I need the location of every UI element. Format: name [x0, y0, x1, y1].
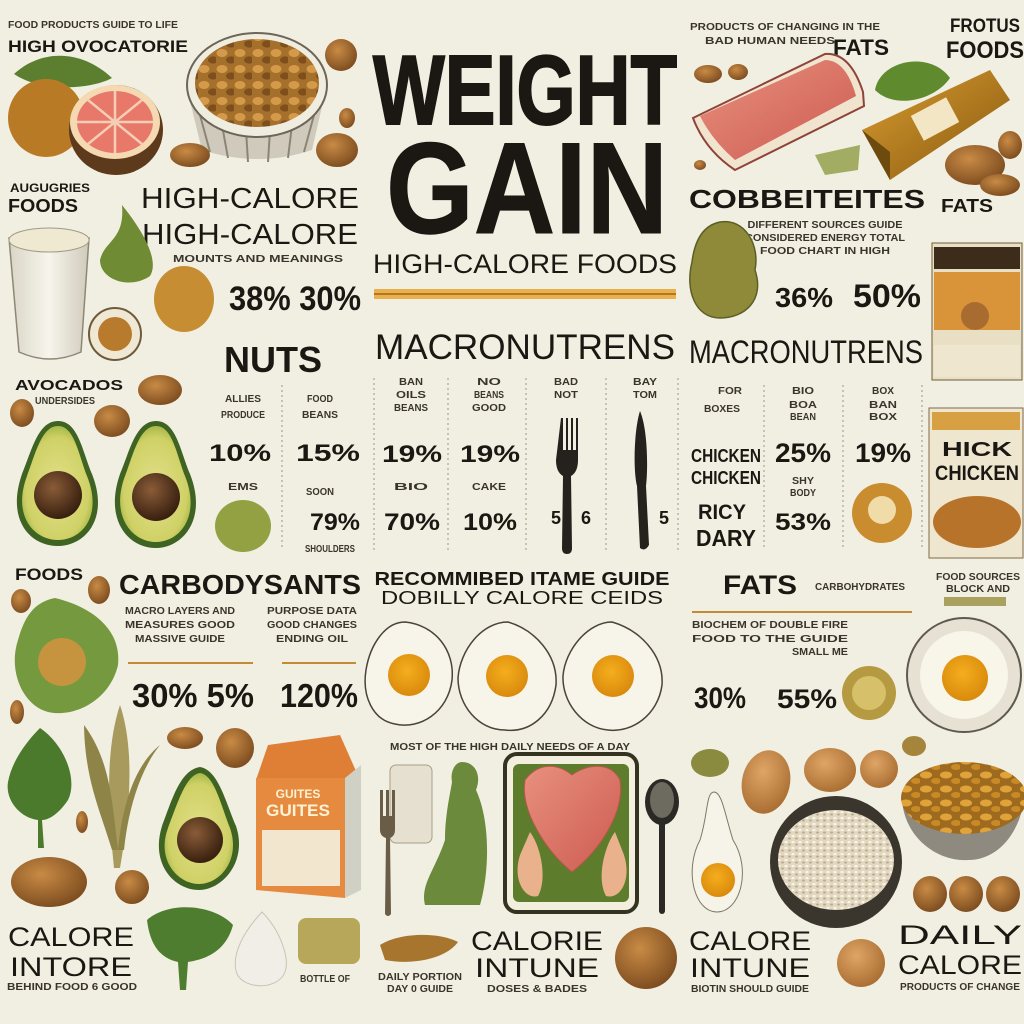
icon: green pods	[100, 205, 153, 283]
text: daily portion	[378, 972, 462, 995]
panel: right carbohydrates: CONSIDERED ENERGY TOTAL	[745, 233, 905, 244]
panel: top-right fats and foods	[690, 16, 1024, 196]
column labels: TOM	[633, 390, 657, 401]
panel: right chicken data: 53%	[775, 509, 831, 536]
panel: right chicken data: BEAN	[790, 412, 816, 423]
icon: cup	[390, 765, 432, 843]
section: high-calorie heading and milk cup: HIGH-CALORE	[141, 183, 359, 215]
icon: milk cup	[9, 228, 89, 359]
icon: nuts	[10, 375, 182, 437]
panel: bottom-right foods	[689, 736, 1024, 995]
panel: right chicken data	[691, 385, 1023, 558]
section: high-calorie heading and milk cup: HIGH-CALORE	[142, 219, 358, 251]
percent values: 30%	[694, 682, 746, 715]
icon: avocado left	[17, 421, 98, 546]
section: high-calorie heading and milk cup: MOUNTS AND MEANINGS	[173, 254, 343, 265]
title: WEIGHT	[373, 35, 677, 145]
section: top-left high calorie foods: AUGUGRIES	[10, 181, 90, 195]
data columns	[209, 385, 360, 555]
panel: right chicken data: BAN	[869, 400, 897, 411]
panel: carbohydrates left: MACRO LAYERS AND	[125, 606, 235, 617]
icon: knife	[635, 411, 649, 549]
icon: white ladle	[692, 792, 742, 912]
text: calorie intake: INTORE	[10, 952, 132, 982]
heading: macronutrients right: MACRONUTRENS	[689, 334, 923, 370]
text: calorie intake: INTUNE	[475, 953, 599, 983]
percent values: BIO	[394, 482, 428, 493]
panel: right carbohydrates: DIFFERENT SOURCES GUIDE	[748, 220, 903, 231]
text: calorie intake: DOSES & BADES	[487, 984, 587, 995]
panel: carbohydrates left	[10, 565, 361, 724]
text: calorie intake: INTUNE	[690, 953, 810, 983]
icon: snack package	[932, 243, 1022, 380]
panel: right carbohydrates: COBBEITEITES	[689, 184, 925, 214]
data columns: EMS	[228, 482, 258, 493]
panel: top-right fats and foods: FATS	[833, 35, 889, 60]
percent: 36 and 30: 38% 30%	[229, 280, 361, 318]
icon: raw steak	[693, 54, 864, 170]
panel: avocados	[10, 375, 360, 555]
icon: egg plate	[907, 618, 1021, 732]
icon: squash half	[8, 79, 84, 157]
icon: milk carton	[256, 735, 361, 898]
panel: fats bottom-right: CARBOHYDRATES	[815, 582, 905, 593]
icon: pistachios	[298, 918, 360, 964]
percent values: 19%	[460, 441, 520, 468]
panel: recommended intake guide	[365, 569, 670, 753]
panel: right carbohydrates: 50%	[853, 278, 921, 314]
panel: right chicken data: BOX	[872, 386, 894, 397]
panel: top-right fats and foods: PRODUCTS OF CHANGING IN THE	[690, 22, 880, 33]
percent values: 19%	[382, 441, 442, 468]
title: GAIN	[386, 115, 668, 261]
panel: right chicken data: CHICKEN	[691, 446, 761, 466]
column labels: NOT	[554, 390, 578, 401]
panel: bottom-left foods	[7, 705, 361, 993]
text: daily portion: DAILY PORTION	[378, 972, 462, 983]
icon: nuts	[11, 727, 254, 907]
text: calorie intake: CALORIE	[471, 926, 603, 956]
icon: drumstick nut	[380, 935, 458, 962]
icon: round egg	[837, 939, 885, 987]
panel: carbohydrates left: GOOD CHANGES	[267, 620, 357, 631]
icon: herb leaves	[14, 56, 112, 87]
icon: fried egg two	[458, 622, 556, 730]
text: daily calorie	[898, 920, 1022, 993]
section: top-left high calorie foods	[8, 20, 358, 216]
icon: eggs and nuts	[736, 746, 898, 818]
percent values: 5	[659, 508, 669, 528]
panel: bottom-centre plate	[378, 754, 679, 995]
text: calorie intake: CALORE	[8, 922, 134, 952]
panel: right carbohydrates	[689, 184, 1022, 380]
panel: right chicken data: BIO	[792, 386, 814, 397]
subtitle	[373, 249, 677, 299]
panel: right chicken data: BOA	[789, 400, 817, 411]
data columns: ALLIES	[225, 394, 261, 405]
caption: MOST OF THE HIGH DAILY NEEDS OF A DAY	[390, 742, 630, 753]
icon: spinach bunch	[147, 907, 233, 990]
icon: fried egg one	[365, 622, 452, 725]
percent values	[694, 682, 837, 715]
panel: macronutrients centre: MACRONUTRENS	[375, 328, 675, 367]
column labels: BAD	[554, 377, 578, 388]
text: calorie intake: CALORE	[689, 926, 811, 956]
icon: milk carton: GUITES	[266, 801, 330, 820]
column labels: BEANS	[394, 403, 428, 414]
icon: white egg	[235, 912, 286, 986]
icon: fork	[380, 790, 395, 916]
panel: carbohydrates left: MASSIVE GUIDE	[135, 634, 225, 645]
percent: 36 and 50: 36%	[775, 282, 833, 313]
heading: nuts: NUTS	[224, 339, 322, 380]
icon: orange ball	[615, 927, 677, 989]
data columns: 15%	[296, 440, 360, 467]
panel: fats bottom-right: FATS	[723, 570, 797, 600]
panel: fats bottom-right: BIOCHEM OF DOUBLE FIRE	[692, 620, 848, 631]
panel: right chicken data: SHY	[792, 476, 814, 487]
percent values: 70%	[384, 509, 440, 536]
icon: avocado half	[159, 767, 239, 890]
icon: seeded pastry	[842, 666, 896, 720]
icon: scattered nuts	[170, 39, 358, 167]
icon: small nuts	[10, 576, 110, 724]
icon: nuts	[694, 64, 1022, 196]
panel: fats bottom-right	[692, 570, 1021, 732]
panel: fats bottom-right: FOOD SOURCES	[936, 572, 1020, 583]
icon: green seed	[215, 500, 271, 552]
icon: green squash	[690, 222, 758, 318]
column labels: BAY	[633, 377, 657, 388]
data columns: 10%	[209, 440, 271, 467]
icon: butter block	[862, 70, 1010, 180]
subtitle: HIGH-CALORE FOODS	[373, 249, 677, 279]
panel: macronutrients centre	[374, 328, 678, 554]
data columns: PRODUCE	[221, 410, 265, 421]
section: top-left high calorie foods: FOODS	[8, 196, 78, 216]
panel: right chicken data: 19%	[855, 438, 911, 468]
icon: green herb	[815, 145, 860, 175]
column labels: BEANS	[474, 390, 504, 401]
icon: small bowl	[89, 308, 141, 360]
icon: small seed	[902, 736, 926, 756]
panel: fats bottom-right: FOOD TO THE GUIDE	[692, 634, 848, 645]
icon: spoon	[645, 779, 679, 914]
text: daily calorie: CALORE	[898, 950, 1022, 980]
percent values: CAKE	[472, 482, 506, 493]
panel: right chicken data: FOR	[718, 386, 743, 397]
panel: avocados: UNDERSIDES	[35, 396, 95, 407]
icon: casserole dish	[186, 33, 327, 162]
panel: fats bottom-right: SMALL ME	[792, 647, 848, 658]
icon: green salad	[15, 598, 118, 713]
text: calorie intake	[689, 926, 811, 995]
text: daily calorie: DAILY	[898, 920, 1022, 950]
icon: chicken package: HICK	[942, 439, 1013, 461]
icon: grapefruit half	[69, 85, 163, 175]
percent values	[132, 677, 358, 714]
panel: fats bottom-right: BLOCK AND	[946, 584, 1010, 595]
panel: right chicken data: BOX	[869, 412, 897, 423]
panel: carbohydrates left: CARBODYSANTS	[119, 569, 361, 600]
icon: three seeds	[913, 876, 1020, 912]
text: daily portion: DAY 0 GUIDE	[387, 984, 453, 995]
data columns: SOON	[306, 487, 334, 498]
panel: bottom-left foods: BOTTLE OF	[300, 974, 350, 985]
text: calorie intake	[471, 926, 603, 995]
panel: carbohydrates left: MEASURES GOOD	[125, 620, 235, 631]
panel: carbohydrates left: ENDING OIL	[276, 634, 348, 645]
column labels: OILS	[396, 390, 426, 401]
column labels: BAN	[399, 377, 423, 388]
icon: avocado right	[115, 421, 196, 548]
percent values: 55%	[777, 684, 837, 714]
icon: green nut	[691, 749, 729, 777]
column labels: GOOD	[472, 403, 506, 414]
section: high-calorie heading and milk cup	[9, 183, 361, 380]
icon: chicken package	[929, 408, 1023, 558]
column labels	[394, 377, 657, 414]
panel: right chicken data: 25%	[775, 438, 831, 468]
text: calorie intake: BIOTIN SHOULD GUIDE	[691, 984, 809, 995]
icon: spinach leaf	[8, 728, 71, 848]
panel: top-right fats and foods: BAD HUMAN NEEDS	[705, 36, 835, 47]
data columns: FOOD	[307, 394, 333, 405]
text: daily calorie: PRODUCTS OF CHANGE	[900, 982, 1020, 993]
icon: round pastry	[852, 483, 912, 543]
percent values: 30% 5%	[132, 677, 254, 714]
icon: fork	[556, 418, 578, 554]
text: calorie intake	[7, 922, 137, 993]
data columns: BEANS	[302, 410, 338, 421]
icon: round nut	[154, 266, 214, 332]
panel: right chicken data: BODY	[790, 488, 816, 499]
panel: right chicken data: BOXES	[704, 404, 740, 415]
panel: right carbohydrates: FOOD CHART IN HIGH	[760, 246, 890, 257]
icon: meat tray	[505, 754, 637, 912]
panel: recommended intake guide: RECOMMIBED ITAME GUIDE	[374, 569, 670, 589]
data columns: 79%	[310, 509, 360, 536]
panel: recommended intake guide: DOBILLY CALORE CEIDS	[381, 588, 663, 608]
panel: right carbohydrates: FATS	[941, 196, 993, 216]
panel: carbohydrates left: FOODS	[15, 565, 83, 584]
icon: milk carton: GUITES	[276, 787, 320, 801]
panel: carbohydrates left: PURPOSE DATA	[267, 606, 357, 617]
text: calorie intake: BEHIND FOOD 6 GOOD	[7, 982, 137, 993]
data columns: SHOULDERS	[305, 544, 355, 555]
icon: leafy greens	[875, 61, 950, 101]
column labels: NO	[477, 377, 501, 388]
section: top-left high calorie foods: HIGH OVOCATORIE	[8, 37, 188, 56]
panel: right chicken data: CHICKEN	[691, 468, 761, 488]
percent values: 5 6	[551, 508, 591, 528]
section: top-left high calorie foods: FOOD PRODUCTS GUIDE TO LIFE	[8, 20, 178, 31]
percent values	[382, 441, 669, 536]
icon: nut bowl	[901, 762, 1024, 860]
percent values: 120%	[280, 677, 358, 714]
title	[373, 35, 677, 261]
panel: right chicken data: RICY	[698, 501, 746, 524]
icon: wheat stalks	[84, 705, 160, 868]
icon: green figure	[424, 762, 487, 905]
panel: avocados: AVOCADOS	[15, 377, 123, 394]
percent values: 10%	[463, 509, 517, 536]
panel: right chicken data: DARY	[696, 525, 756, 551]
icon: fried egg three	[563, 622, 662, 730]
icon: rice bowl	[770, 796, 902, 928]
